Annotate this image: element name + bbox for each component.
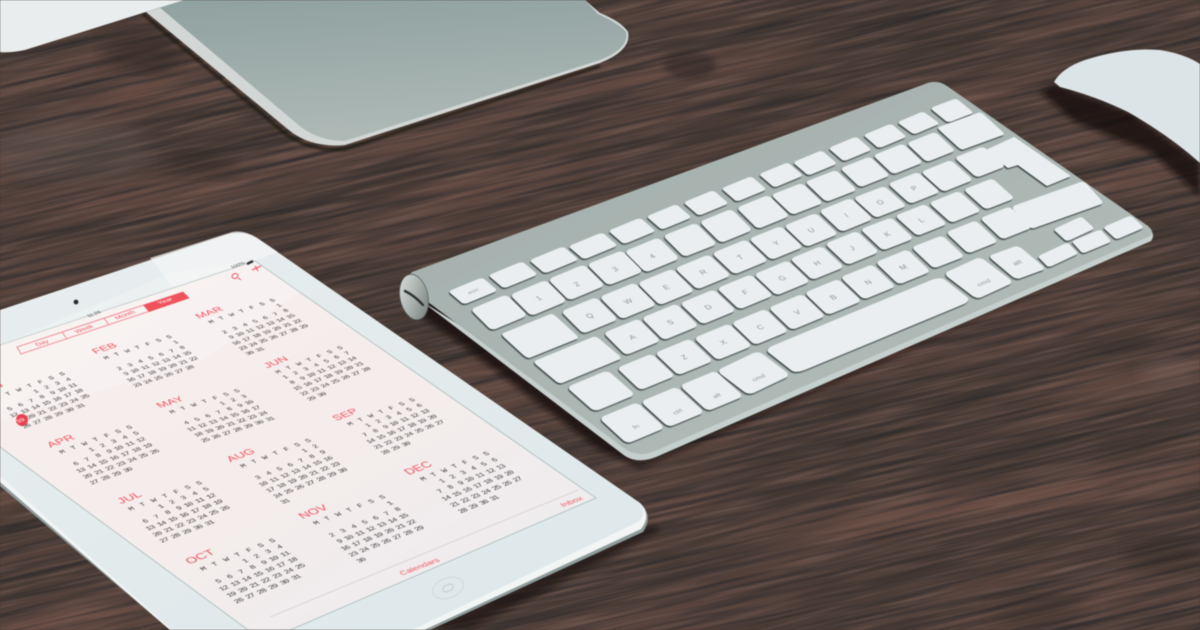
key legends: Q (584, 312, 596, 320)
month: January: 12 13 14 15 16 17 18 (8, 388, 86, 419)
screen (0, 261, 596, 630)
key legends: P (909, 184, 920, 192)
month: September: M T W T F S S (343, 398, 418, 429)
key legends: O (874, 198, 886, 206)
month: October: 5 6 7 8 9 10 11 (210, 550, 294, 587)
month: December: 1 2 3 4 5 6 (424, 457, 501, 490)
keyboard (396, 82, 1153, 468)
month: March (193, 290, 318, 357)
month: February: 9 10 11 12 13 14 15 (119, 351, 194, 378)
month: October (182, 527, 316, 605)
key legends: 2 (572, 281, 582, 288)
month: April: 13 14 15 16 17 18 19 (75, 443, 155, 475)
key legends: C (754, 323, 767, 331)
key legends: N (862, 278, 874, 286)
month: April: APR (44, 433, 78, 450)
month: June (260, 337, 381, 403)
month: October: OCT (182, 547, 219, 566)
month: February (88, 326, 208, 389)
segmented control: Week (73, 324, 96, 335)
month: February: 2 3 4 5 6 7 8 (112, 345, 188, 373)
key legends: D (702, 303, 715, 311)
key legends: M (897, 263, 910, 271)
key legends: J (847, 244, 857, 252)
key legends: fn (631, 424, 642, 430)
month: June: 15 16 17 18 19 20 21 (292, 361, 367, 392)
segmented control: Month (114, 310, 138, 321)
month: January (0, 362, 98, 431)
month: November: 2 3 4 5 6 7 8 (324, 507, 404, 540)
month: July: 1 2 3 4 5 (131, 486, 212, 520)
keycaps (448, 98, 1144, 444)
key legends: alt (711, 392, 723, 400)
month: March: 23 24 25 26 27 28 29 (237, 324, 311, 352)
mouse shadow (1040, 84, 1200, 196)
key legends: cmd (976, 278, 993, 288)
key legends: I (842, 212, 851, 219)
month: June: 1 2 3 4 5 6 7 (278, 351, 353, 382)
key legends: 4 (647, 252, 658, 260)
key legends: F (740, 288, 751, 296)
month: July: 27 28 29 30 31 (159, 519, 218, 545)
month: March: 1 (210, 303, 285, 331)
month: February: 1 (105, 340, 181, 368)
month: April: 27 28 29 30 (89, 467, 135, 486)
key legends: alt (1010, 258, 1024, 267)
month: December: 21 22 23 24 25 26 27 (449, 476, 525, 509)
month: December: 14 15 16 17 18 19 20 (440, 470, 518, 503)
key legends (467, 184, 1024, 430)
keyboard front edge (420, 230, 1153, 460)
month: June: 29 30 (306, 392, 329, 403)
month: December: 7 8 9 10 11 12 13 (432, 463, 509, 496)
month: November: 30 (355, 557, 370, 565)
key legends: 1 (534, 294, 545, 302)
month: December: DEC (400, 459, 436, 477)
month: May: MAY (154, 395, 188, 410)
camera (74, 300, 78, 304)
status bar: 100% (230, 261, 248, 270)
month: November: 1 (316, 501, 396, 534)
month: November (295, 484, 435, 565)
month: June: 22 23 24 25 26 27 28 (299, 366, 374, 397)
month: August: 17 18 19 20 21 22 23 (265, 462, 343, 494)
bezel reflection (150, 231, 278, 290)
month: November: M T W T F S S (308, 494, 389, 528)
month: April: M T W T F S S (55, 425, 136, 457)
month: August: M T W T F S S (236, 438, 315, 471)
stand top face (158, 0, 626, 141)
keyboard cast shadow (418, 244, 1150, 468)
status bar: 11:26 (86, 310, 103, 319)
key legends: Z (679, 353, 690, 361)
month: December (400, 440, 534, 515)
month: June: JUN (261, 355, 291, 370)
key legends: G (776, 274, 788, 282)
key legends: A (627, 333, 639, 341)
key legends: T (735, 253, 746, 261)
stand shadow (143, 14, 600, 149)
edge highlight (0, 233, 646, 630)
month: February: FEB (89, 342, 120, 356)
keyboard end cylinder (396, 272, 432, 322)
month: January: 1 2 3 4 (0, 377, 73, 408)
month: November: NOV (295, 503, 331, 521)
home button (430, 573, 466, 603)
month: October: 1 2 3 4 (202, 544, 286, 580)
mouse (1040, 49, 1200, 196)
segmented control: Year (156, 296, 175, 306)
month: November: 23 24 25 26 27 28 29 (347, 525, 428, 559)
toolbar label: Inbox: Inbox (558, 495, 586, 508)
month: May: 11 12 13 14 15 16 17 (186, 405, 263, 433)
month: January: 19 20 21 22 23 24 25 (15, 394, 91, 425)
monitor base edge (0, 0, 184, 52)
month: March: 9 10 11 12 13 14 15 (224, 313, 298, 342)
segmented control (17, 292, 189, 354)
key legends: L (916, 216, 927, 224)
key legends: W (622, 297, 636, 306)
month: April (43, 415, 170, 486)
month: September: 21 22 23 24 25 26 27 (372, 420, 447, 451)
key legends: 3 (610, 265, 621, 273)
month: July: 13 14 15 16 17 18 19 (145, 499, 225, 532)
key legends: R (697, 268, 710, 276)
toolbar divider (270, 490, 578, 617)
status bar (86, 261, 253, 319)
month: August: 24 25 26 27 28 29 30 (272, 467, 350, 500)
toolbar label: Calendars: Calendars (397, 557, 442, 577)
month: May: 18 19 20 21 22 23 24 (193, 411, 270, 438)
tablet silver edge (0, 233, 648, 630)
month: March: M T W T F S S (204, 298, 278, 326)
month: December: M T W T F S S (416, 451, 493, 484)
month: September: SEP (330, 407, 361, 423)
month: July: 6 7 8 9 10 11 12 (138, 493, 218, 526)
key legends: K (882, 230, 894, 238)
month: April: 1 2 3 4 5 (61, 431, 141, 463)
month: June: 8 9 10 11 12 13 14 (285, 356, 360, 387)
month: October: M T W T F S S (195, 537, 279, 574)
key legends: H (811, 259, 823, 267)
month: October: 19 20 21 22 23 24 25 (225, 562, 309, 599)
month: September: 28 29 30 (380, 441, 414, 456)
key legends: Y (771, 239, 782, 247)
month: May: M T W T F S S (165, 389, 242, 416)
key legends: B (828, 293, 839, 301)
month: March: 2 3 4 5 6 7 8 (217, 308, 291, 337)
month: February: 16 17 18 19 20 21 22 (125, 356, 201, 384)
screen reflection (0, 261, 300, 420)
month: March: MAR (193, 305, 226, 320)
key legends: cmd (751, 373, 768, 383)
keyboard body (405, 82, 1152, 454)
month: December: 28 29 30 31 (457, 495, 503, 515)
segmented control: Day (34, 339, 52, 348)
month: November: 16 17 18 19 20 21 22 (340, 519, 420, 552)
month: February: M T W T F S S (99, 335, 175, 362)
key legends: esc (467, 288, 481, 295)
month: May: 1 2 3 (172, 394, 249, 422)
month: August: AUG (224, 447, 258, 464)
tablet bezel (0, 233, 644, 630)
month: November: 9 10 11 12 13 14 15 (332, 513, 412, 546)
stand rim (146, 0, 628, 145)
tablet shadow (420, 525, 660, 630)
month: June: M T W T F S S (271, 346, 346, 377)
month: January: 26 27 28 29 30 31 (21, 403, 87, 430)
month: August: 10 11 12 13 14 15 16 (257, 456, 335, 488)
month: May: 4 5 6 7 8 9 10 (179, 400, 256, 427)
month: August: 1 2 (243, 444, 321, 477)
month: July: JUL (114, 489, 145, 506)
month: August: 3 4 5 6 7 8 9 (250, 450, 328, 483)
month: April: 20 21 22 23 24 25 26 (82, 449, 162, 481)
month: September: 1 2 3 4 5 6 (350, 403, 425, 434)
month: August: 31 (279, 498, 294, 506)
month: March: 30 31 (244, 347, 267, 357)
today marker (16, 414, 28, 426)
month: March: 16 17 18 19 20 21 22 (231, 318, 305, 347)
tablet (0, 231, 660, 630)
month: May: 25 26 27 28 29 30 31 (200, 416, 277, 444)
month: January: 5 6 7 8 9 10 11 (2, 382, 80, 414)
month: February: 23 24 25 26 27 28 (132, 365, 197, 389)
monitor stand (143, 0, 628, 149)
month: September (330, 389, 455, 457)
month: September: 14 15 16 17 18 19 20 (365, 414, 440, 445)
month: April: 6 7 8 9 10 11 12 (68, 437, 148, 469)
key legends: S (665, 318, 676, 326)
month: August (224, 429, 358, 506)
key legends: E (661, 283, 672, 291)
month: July: M T W T F S S (124, 480, 205, 514)
icon: plus (252, 266, 261, 271)
month: October: 12 13 14 15 16 17 18 (217, 556, 301, 593)
month: September: 7 8 9 10 11 12 13 (357, 409, 432, 440)
month: July (111, 470, 240, 545)
key legends: ctrl (671, 408, 685, 416)
icon: search (231, 273, 241, 280)
key legends: X (718, 338, 730, 346)
month: October: 26 27 28 29 30 31 (232, 573, 305, 605)
month: July: 20 21 22 23 24 25 26 (152, 505, 233, 538)
key legends: U (805, 226, 817, 234)
key legends: V (792, 308, 804, 316)
month: May (153, 380, 277, 444)
